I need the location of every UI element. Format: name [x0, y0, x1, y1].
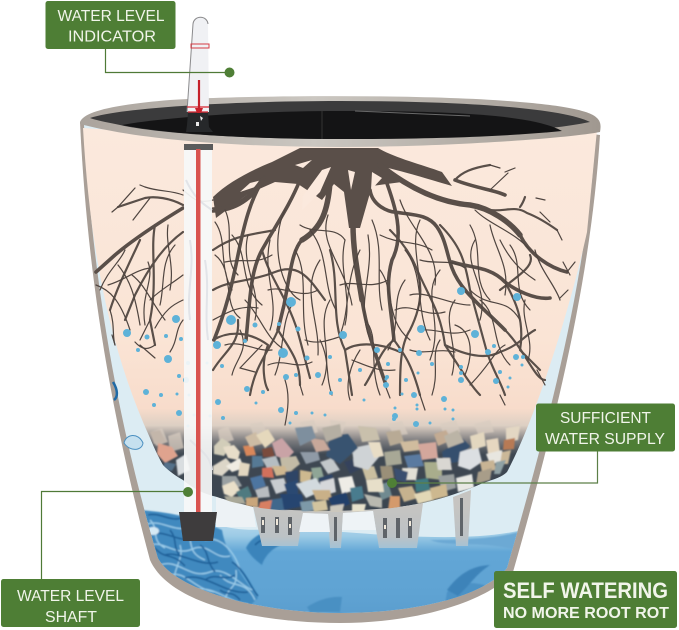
callout: sufficient water supply: SUFFICIENT [560, 410, 651, 427]
pot rim and opening [80, 96, 601, 147]
pot: outer wall [80, 100, 600, 623]
badge: self watering no more root rot: SELF WATERING [503, 578, 668, 603]
callout: water level indicator [46, 1, 234, 78]
gravel layer [150, 420, 520, 514]
callout: water level indicator: WATER LEVEL [58, 8, 165, 25]
callout: water level shaft: SHAFT [45, 609, 97, 626]
callout: sufficient water supply: WATER SUPPLY [545, 431, 665, 448]
root trunk [213, 148, 452, 228]
callout: water level shaft [1, 487, 193, 627]
badge: self watering no more root rot: NO MORE ROOT ROT [503, 605, 669, 622]
water droplets [123, 287, 525, 428]
water level indicator [186, 17, 213, 132]
inner planter legs [216, 490, 471, 548]
root system [96, 148, 575, 425]
callout: water level indicator: INDICATOR [68, 28, 156, 46]
water level shaft [179, 144, 217, 541]
badge: self watering no more root rot [494, 571, 677, 628]
pot: inner planter with cream soil area and gravel base [83, 128, 597, 512]
pot: water reservoir space [84, 125, 596, 613]
callout: sufficient water supply [387, 404, 675, 488]
callout: water level shaft: WATER LEVEL [17, 588, 124, 605]
shaft plug [179, 512, 217, 541]
water in reservoir [144, 510, 518, 613]
splashes on the reservoir wall [113, 382, 143, 449]
